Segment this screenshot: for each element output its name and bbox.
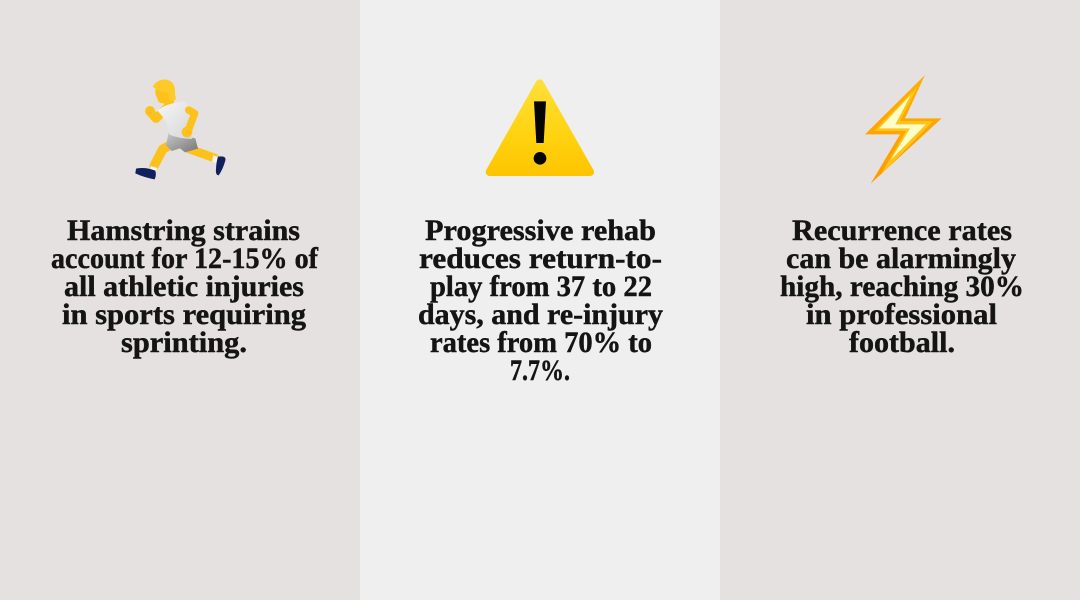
- text: recurrence statistic: Recurrence rates: [792, 215, 1012, 247]
- icon: lightning bolt: [865, 75, 942, 184]
- text: recurrence statistic: [780, 215, 1024, 359]
- panel: hamstring strain prevalence: [0, 0, 360, 600]
- text: rehab statistic: play from 37 to 22: [430, 271, 652, 303]
- text: rehab statistic: rates from 70% to: [430, 327, 652, 359]
- text: hamstring statistic: sprinting.: [121, 327, 247, 359]
- text: hamstring statistic: account for 12-15% of: [51, 243, 319, 275]
- icon: running person: [135, 80, 226, 179]
- text: recurrence statistic: football.: [849, 327, 955, 359]
- text: recurrence statistic: can be alarmingly: [786, 243, 1016, 275]
- text: hamstring statistic: [51, 215, 319, 359]
- text: rehab statistic: 7.7%.: [510, 355, 570, 387]
- text: hamstring statistic: Hamstring strains: [67, 215, 300, 247]
- text: rehab statistic: Progressive rehab: [425, 215, 656, 247]
- text: hamstring statistic: all athletic injuries: [64, 271, 304, 303]
- text: rehab statistic: days, and re-injury: [418, 299, 663, 331]
- panel: recurrence rates: [720, 0, 1080, 600]
- icon: warning triangle: [490, 83, 590, 172]
- text: rehab statistic: [418, 215, 663, 387]
- text: hamstring statistic: in sports requiring: [62, 299, 306, 331]
- text: rehab statistic: reduces return-to-: [419, 243, 662, 275]
- text: recurrence statistic: in professional: [806, 299, 997, 331]
- text: recurrence statistic: high, reaching 30%: [780, 271, 1024, 303]
- panel: progressive rehab outcomes: [360, 0, 720, 600]
